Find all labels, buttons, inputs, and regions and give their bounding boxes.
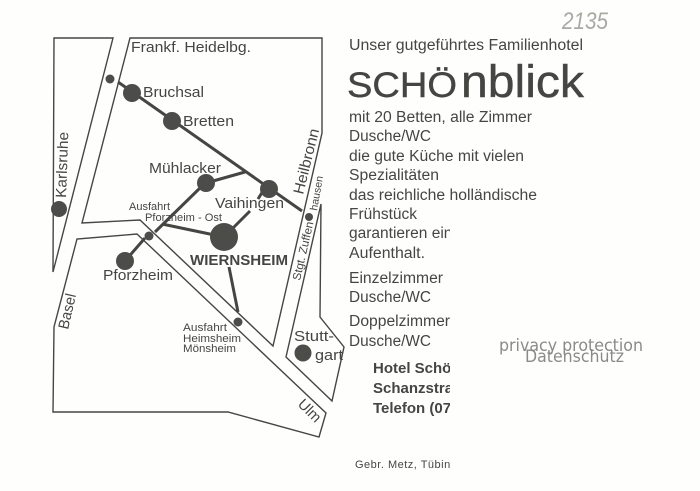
description: die gute Küche mit vielen (349, 148, 524, 165)
map labels: Bruchsal (143, 84, 204, 101)
road outlines (53, 38, 344, 437)
map labels: Heilbronn (290, 127, 323, 196)
map labels (53, 39, 344, 426)
hotel address (373, 362, 450, 416)
description: Aufenthalt. (349, 245, 425, 262)
map labels: gart (315, 347, 344, 364)
map labels: Pforzheim (103, 267, 173, 284)
room types: Doppelzimmer (349, 313, 450, 330)
route network (118, 82, 302, 312)
room types: Dusche/WC (349, 333, 431, 350)
hotel logo: SCHÖ (347, 66, 457, 105)
printer credit: Gebr. Metz, Tübingen (355, 459, 471, 471)
map labels: Stgt. Zuffen (291, 221, 316, 282)
map labels: Stutt- (294, 328, 334, 345)
description (349, 109, 537, 262)
room types (349, 270, 450, 350)
hotel logo: nblick (461, 56, 585, 107)
description: garantieren ein (349, 225, 452, 242)
map labels: Vaihingen (215, 195, 284, 212)
map labels: Bretten (183, 113, 234, 130)
handwritten number: 2135 (561, 8, 609, 35)
map labels: Frankf. Heidelbg. (131, 39, 251, 56)
map labels: Pforzheim - Ost (145, 212, 222, 224)
watermark (499, 336, 643, 367)
description: mit 20 Betten, alle Zimmer (349, 109, 532, 126)
map (51, 38, 344, 437)
hotel logo (347, 56, 585, 107)
watermark: privacy protection (499, 336, 643, 356)
description: Dusche/WC (349, 128, 431, 145)
map labels: Karlsruhe (53, 132, 72, 198)
map labels: Basel (55, 292, 80, 331)
hotel address: Schanzstraße (373, 380, 471, 397)
map labels: Mühlacker (149, 160, 221, 177)
hotel address: Hotel Schönblick (373, 360, 495, 377)
map labels: Ausfahrt (129, 201, 170, 213)
tagline: Unser gutgeführtes Familienhotel (349, 37, 583, 54)
watermark: Datenschutz (525, 347, 624, 367)
map labels: Ausfahrt (183, 322, 227, 334)
map labels: hausen (308, 175, 326, 212)
hotel address: Telefon (07 (373, 400, 451, 417)
map labels: Heimsheim (183, 333, 241, 345)
room types: Einzelzimmer (349, 270, 443, 287)
description: das reichliche holländische (349, 187, 537, 204)
map labels: WIERNSHEIM (190, 253, 288, 269)
description: Spezialitäten (349, 167, 439, 184)
map labels: Mönsheim (183, 343, 236, 355)
room types: Dusche/WC (349, 289, 431, 306)
town markers (51, 74, 313, 362)
map labels: Ulm (294, 396, 325, 426)
description: Frühstück (349, 206, 417, 223)
